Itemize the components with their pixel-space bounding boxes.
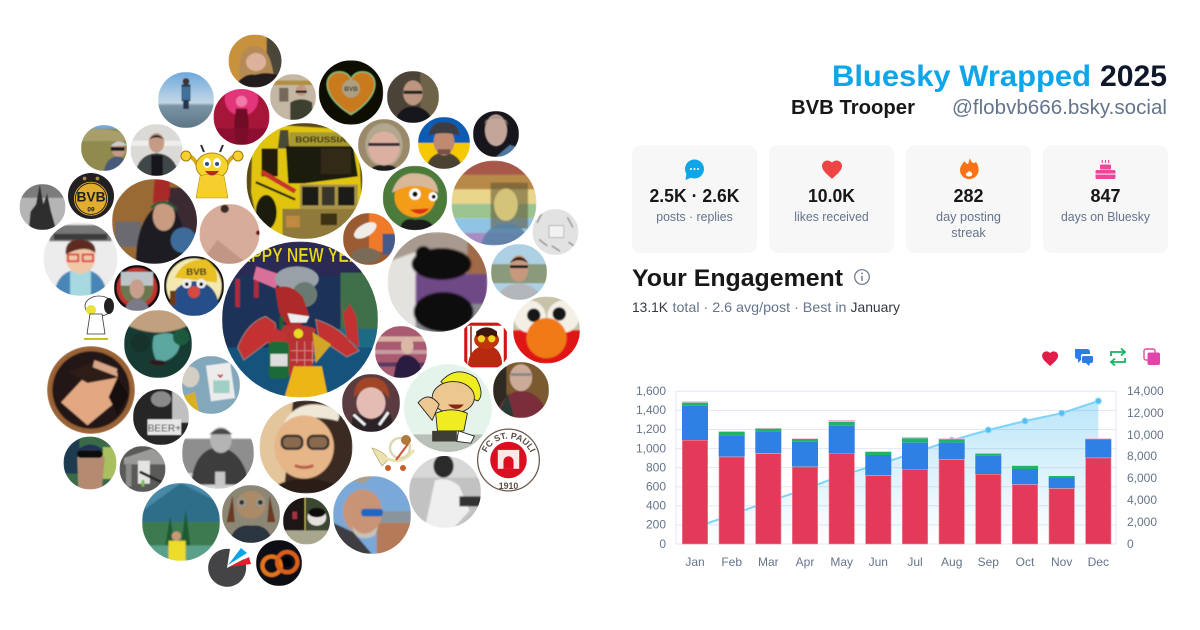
left axis labels: 1,000 <box>636 442 666 456</box>
avatar: blue puppet with yellow BVB hat <box>164 256 224 316</box>
display name: BVB Trooper <box>791 97 915 119</box>
icon: likes legend <box>1042 351 1058 366</box>
avatar: woman with blond hair <box>228 34 283 88</box>
month labels: May <box>830 555 853 569</box>
avatar: man with red ring frame <box>114 265 160 311</box>
left axis labels: 1,400 <box>636 403 666 417</box>
avatar: Iron Maiden style Happy New Year artwork <box>222 242 378 398</box>
panel: likes received <box>769 145 894 253</box>
month labels: Mar <box>758 555 779 569</box>
avatar: woman with reindeer antlers <box>112 179 202 264</box>
title: year: 2025 <box>1100 60 1167 93</box>
avatar: blue puppet with yellow BVB hat: BVB <box>186 267 207 278</box>
stat label: day posting <box>936 210 1001 224</box>
avatar: BVB crest: BVB <box>76 190 106 205</box>
avatar: BVB crest <box>68 173 114 219</box>
left axis labels: 1,200 <box>636 422 666 436</box>
avatar: woman with rainbow overlay <box>452 160 536 246</box>
avatar: grey man at table <box>182 417 254 489</box>
stat value: 10.0K <box>808 186 855 206</box>
avatar: man with sunglasses in leaves <box>64 436 116 490</box>
avatar: skin close-up <box>200 204 261 264</box>
avatar: bald man at brick wall <box>375 326 427 378</box>
chart: monthly engagement stacked bars with cumulative line <box>636 384 1164 569</box>
avatar: green frog close-up <box>124 310 192 378</box>
avatar: man with black glasses <box>387 71 439 123</box>
avatar: hiker on hill <box>81 125 129 171</box>
avatar: mouse cartoon with poster <box>181 356 240 414</box>
avatar: orange knitted toy <box>383 166 447 230</box>
month labels <box>685 555 1109 569</box>
icon: Snoopy with yellow scarf <box>84 296 114 339</box>
cumulative area <box>695 401 1098 544</box>
avatar: neon heart with BVB badge: BVB <box>344 86 358 93</box>
panel: day posting streak <box>906 145 1031 253</box>
right axis labels: 10,000 <box>1127 428 1164 442</box>
avatar: mountain lake landscape <box>142 483 220 561</box>
avatar: black cats on purple blanket <box>388 232 488 332</box>
month labels: Oct <box>1016 555 1035 569</box>
icon: flame <box>960 158 979 179</box>
left axis labels: 400 <box>646 498 666 512</box>
grid <box>676 391 1116 544</box>
month labels: Jan <box>685 555 705 569</box>
avatar: black and white BEER sign: BEER+ <box>148 424 181 435</box>
avatar: grey cathedral <box>20 184 66 230</box>
right axis labels <box>1127 384 1164 551</box>
stat label: posts · replies <box>656 210 733 224</box>
stat label second line: streak <box>951 226 987 240</box>
avatar: man in dark jacket <box>130 124 182 176</box>
avatar: two cats on orange blanket <box>343 213 396 265</box>
icon: hunting horn <box>372 435 414 471</box>
icon: quotes legend <box>1144 349 1160 365</box>
left axis labels: 800 <box>646 460 666 474</box>
right axis labels: 2,000 <box>1127 515 1157 529</box>
avatar: man standing in water <box>158 72 214 128</box>
month labels: Apr <box>796 555 814 569</box>
avatar: man in cap on Ukraine flag <box>418 117 470 169</box>
avatar: clay alien figure <box>222 485 280 543</box>
month labels: Jul <box>907 555 923 569</box>
left axis labels: 600 <box>646 480 666 494</box>
avatar: BVB crest: 09 <box>87 207 95 214</box>
icon: chat bubble <box>685 160 704 180</box>
right axis labels: 0 <box>1127 537 1134 551</box>
stat label: likes received <box>794 210 869 224</box>
month labels: Jun <box>869 555 888 569</box>
stat value: 847 <box>1090 186 1120 206</box>
avatar: cartoon boy with red glasses <box>44 222 118 296</box>
stat value: 282 <box>954 186 984 206</box>
month labels: Nov <box>1051 555 1072 569</box>
avatar: black and white BEER sign <box>133 389 189 445</box>
avatar: man with glasses outdoors <box>491 244 547 300</box>
avatar: grey building with banner <box>120 446 166 492</box>
avatar: yellow truck: BORUSSIA <box>295 135 347 145</box>
avatar: collage with husky dog <box>283 498 331 544</box>
right axis labels: 4,000 <box>1127 493 1157 507</box>
month labels: Dec <box>1088 555 1109 569</box>
engagement summary: 13.1K <box>632 299 669 315</box>
title: Bluesky Wrapped: Bluesky Wrapped <box>832 60 1091 93</box>
icon: reposts legend <box>1111 348 1125 366</box>
avatar: pencil sketch <box>532 209 578 255</box>
month labels: Sep <box>978 555 999 569</box>
avatar: Elmo close-up <box>513 296 580 364</box>
logo: FC St. Pauli 1910: 1910 <box>499 481 518 491</box>
avatar: bald man with blue sunglasses <box>333 476 411 554</box>
stat label: days on Bluesky <box>1061 210 1151 224</box>
logo: grey pie with blue and red slices <box>208 548 251 587</box>
right axis labels: 12,000 <box>1127 406 1164 420</box>
avatar: chocolate-dipped sticks in bowl <box>47 346 135 434</box>
avatar: yellow truck <box>246 123 362 239</box>
engagement summary: January <box>850 299 900 315</box>
avatar: fiery black hole <box>256 540 302 586</box>
handle: @flobvb666.bsky.social <box>952 97 1167 119</box>
avatar: cartoon kid in yellow hat <box>404 364 492 452</box>
icon: birthday cake <box>1096 160 1116 179</box>
right axis labels: 8,000 <box>1127 449 1157 463</box>
logo: FC St. Pauli 1910: FC ST. PAULI <box>482 432 536 452</box>
avatar: woman with red hair <box>342 374 400 432</box>
avatar: older man with glasses <box>493 362 549 418</box>
cumulative line <box>695 398 1101 528</box>
avatar: woman with glasses <box>358 119 410 171</box>
left axis labels: 200 <box>646 518 666 532</box>
avatar: neon heart with BVB badge <box>319 60 383 125</box>
icon: yellow bee mascot <box>181 145 243 198</box>
left axis labels <box>636 384 666 551</box>
engagement summary <box>632 299 900 315</box>
avatar: red devil cartoon <box>464 322 507 368</box>
avatar: woman in beanie with glasses <box>260 400 352 494</box>
avatar bubble cluster <box>20 34 580 587</box>
heading: Your Engagement: Your Engagement <box>632 265 843 292</box>
avatar: woman in dark room <box>473 111 520 157</box>
engagement summary: total · 2.6 avg/post · Best in <box>672 299 846 315</box>
stat value: 2.5K · 2.6K <box>650 186 740 206</box>
avatar: Iron Maiden style Happy New Year artwork: HAPPY NEW YEAR <box>228 245 372 267</box>
avatar: man with shelf <box>270 74 316 120</box>
right axis labels: 14,000 <box>1127 384 1164 398</box>
left axis labels: 0 <box>659 537 666 551</box>
logo: FC St. Pauli 1910 <box>477 428 540 492</box>
chart legend icons <box>1042 348 1160 366</box>
avatar: pink flare figure <box>214 89 270 145</box>
month labels: Aug <box>941 555 962 569</box>
icon: replies legend <box>1075 349 1093 366</box>
right axis labels: 6,000 <box>1127 471 1157 485</box>
panel: days on Bluesky <box>1043 145 1168 253</box>
icon: info <box>855 270 869 284</box>
month labels: Feb <box>721 555 742 569</box>
icon: heart <box>822 160 842 179</box>
header: title and user names <box>791 60 1167 119</box>
avatar: black and white seated woman <box>409 455 481 528</box>
stacked bars <box>682 401 1111 544</box>
panel: posts and replies <box>632 145 757 253</box>
left axis labels: 1,600 <box>636 384 666 398</box>
